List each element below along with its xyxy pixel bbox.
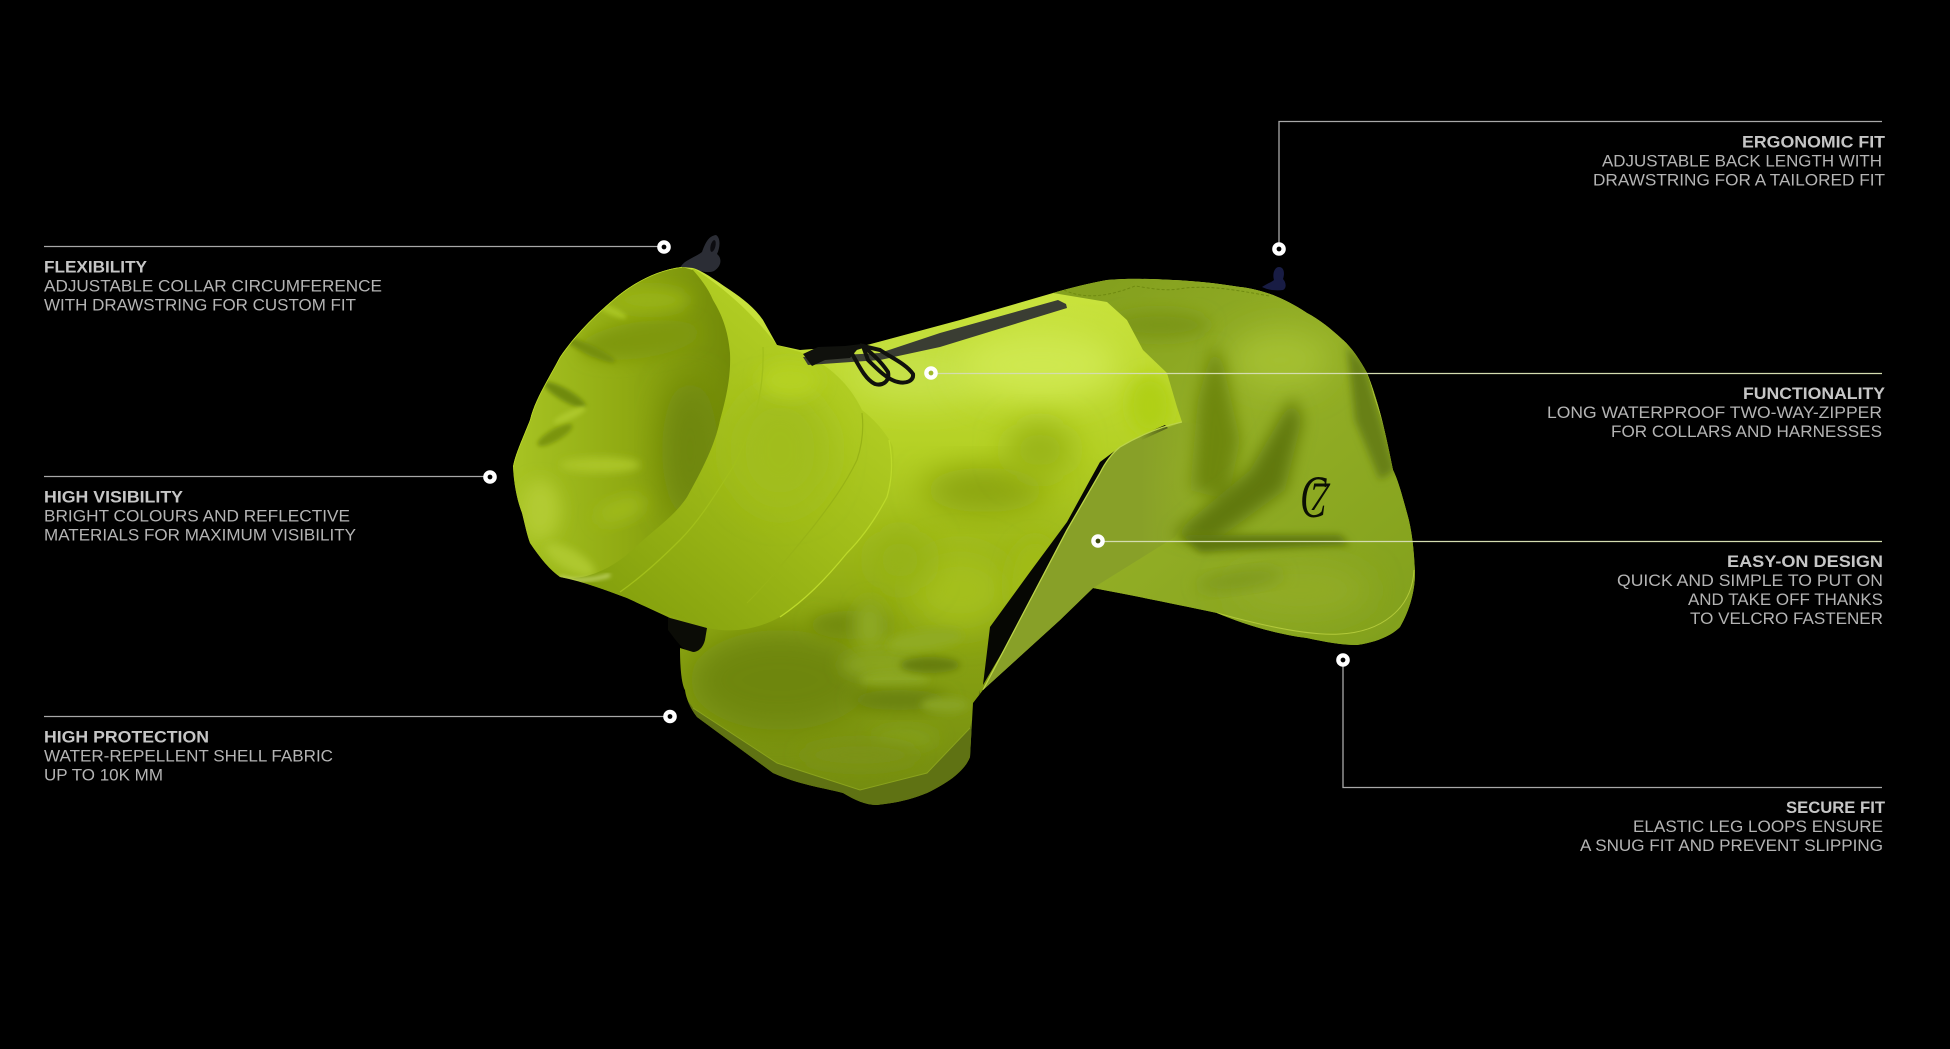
callout: high visibility: MATERIALS FOR MAXIMUM VISIBILITY: [44, 527, 356, 545]
raincoat illustration: [500, 235, 1450, 820]
callout: high protection: UP TO 10K MM: [44, 766, 163, 784]
zipper pulls: [803, 344, 913, 384]
collar rim highlight: [513, 267, 682, 467]
collar seams: [620, 347, 891, 617]
callout: flexibility: WITH DRAWSTRING FOR CUSTOM FIT: [44, 297, 356, 315]
callout: high visibility: HIGH VISIBILITY: [44, 489, 183, 507]
callout: easy-on design: AND TAKE OFF THANKS: [1688, 591, 1883, 609]
back diagonal fold over flap: [1172, 397, 1302, 545]
callout: high visibility: [44, 472, 495, 545]
collar drawstring toggle: [680, 235, 720, 272]
callout: functionality: FOR COLLARS AND HARNESSES: [1611, 423, 1882, 441]
chest panel base: [513, 267, 1415, 805]
callout: flexibility: ADJUSTABLE COLLAR CIRCUMFERENCE: [44, 278, 382, 296]
callout: functionality: [926, 368, 1885, 441]
callout: high protection: WATER-REPELLENT SHELL FABRIC: [44, 748, 333, 766]
callout: easy-on design: QUICK AND SIMPLE TO PUT ON: [1617, 572, 1883, 590]
callout: easy-on design: TO VELCRO FASTENER: [1690, 610, 1883, 628]
infographic: dog raincoat with feature callouts: [44, 120, 1885, 851]
back drawstring toggle: [1262, 267, 1286, 290]
callout: easy-on design: [1093, 536, 1883, 628]
logo: 7: [1309, 474, 1331, 519]
back panel fold shading: [1110, 311, 1395, 615]
callout: high visibility: BRIGHT COLOURS AND REFLECTIVE: [44, 508, 350, 526]
leg hem: [670, 690, 980, 810]
callout: secure fit: A SNUG FIT AND PREVENT SLIPPING: [1580, 837, 1883, 855]
callout: secure fit: SECURE FIT: [1786, 799, 1885, 817]
front leg strap: [668, 615, 707, 652]
callout: secure fit: ELASTIC LEG LOOPS ENSURE: [1633, 818, 1883, 836]
callout: functionality: LONG WATERPROOF TWO-WAY-ZIPPER: [1547, 404, 1882, 422]
back panel stitching: [1217, 570, 1414, 634]
collar inner opening: [513, 267, 730, 578]
callout: easy-on design: EASY-ON DESIGN: [1727, 553, 1883, 571]
callout: flexibility: FLEXIBILITY: [44, 259, 147, 277]
callout: ergonomic fit: DRAWSTRING FOR A TAILORED FIT: [1593, 172, 1885, 190]
jacket body: [513, 267, 1415, 805]
back panel: [983, 278, 1415, 690]
callout: flexibility: [44, 242, 669, 315]
velcro flap: [986, 424, 1177, 687]
callout: functionality: FUNCTIONALITY: [1743, 385, 1885, 403]
callout: ergonomic fit: ADJUSTABLE BACK LENGTH WITH: [1602, 153, 1882, 171]
callout: high protection: HIGH PROTECTION: [44, 728, 209, 746]
logo: C: [1300, 464, 1327, 530]
zipper: [803, 300, 1067, 365]
chest and leg shading: [690, 329, 1172, 769]
callout: ergonomic fit: ERGONOMIC FIT: [1742, 134, 1885, 152]
black gap behind flap: [983, 447, 1120, 685]
callout: ergonomic fit: [1274, 122, 1885, 254]
collar outer cone: [540, 268, 894, 630]
callout: high protection: [44, 712, 675, 784]
callout: secure fit: [1338, 655, 1885, 855]
